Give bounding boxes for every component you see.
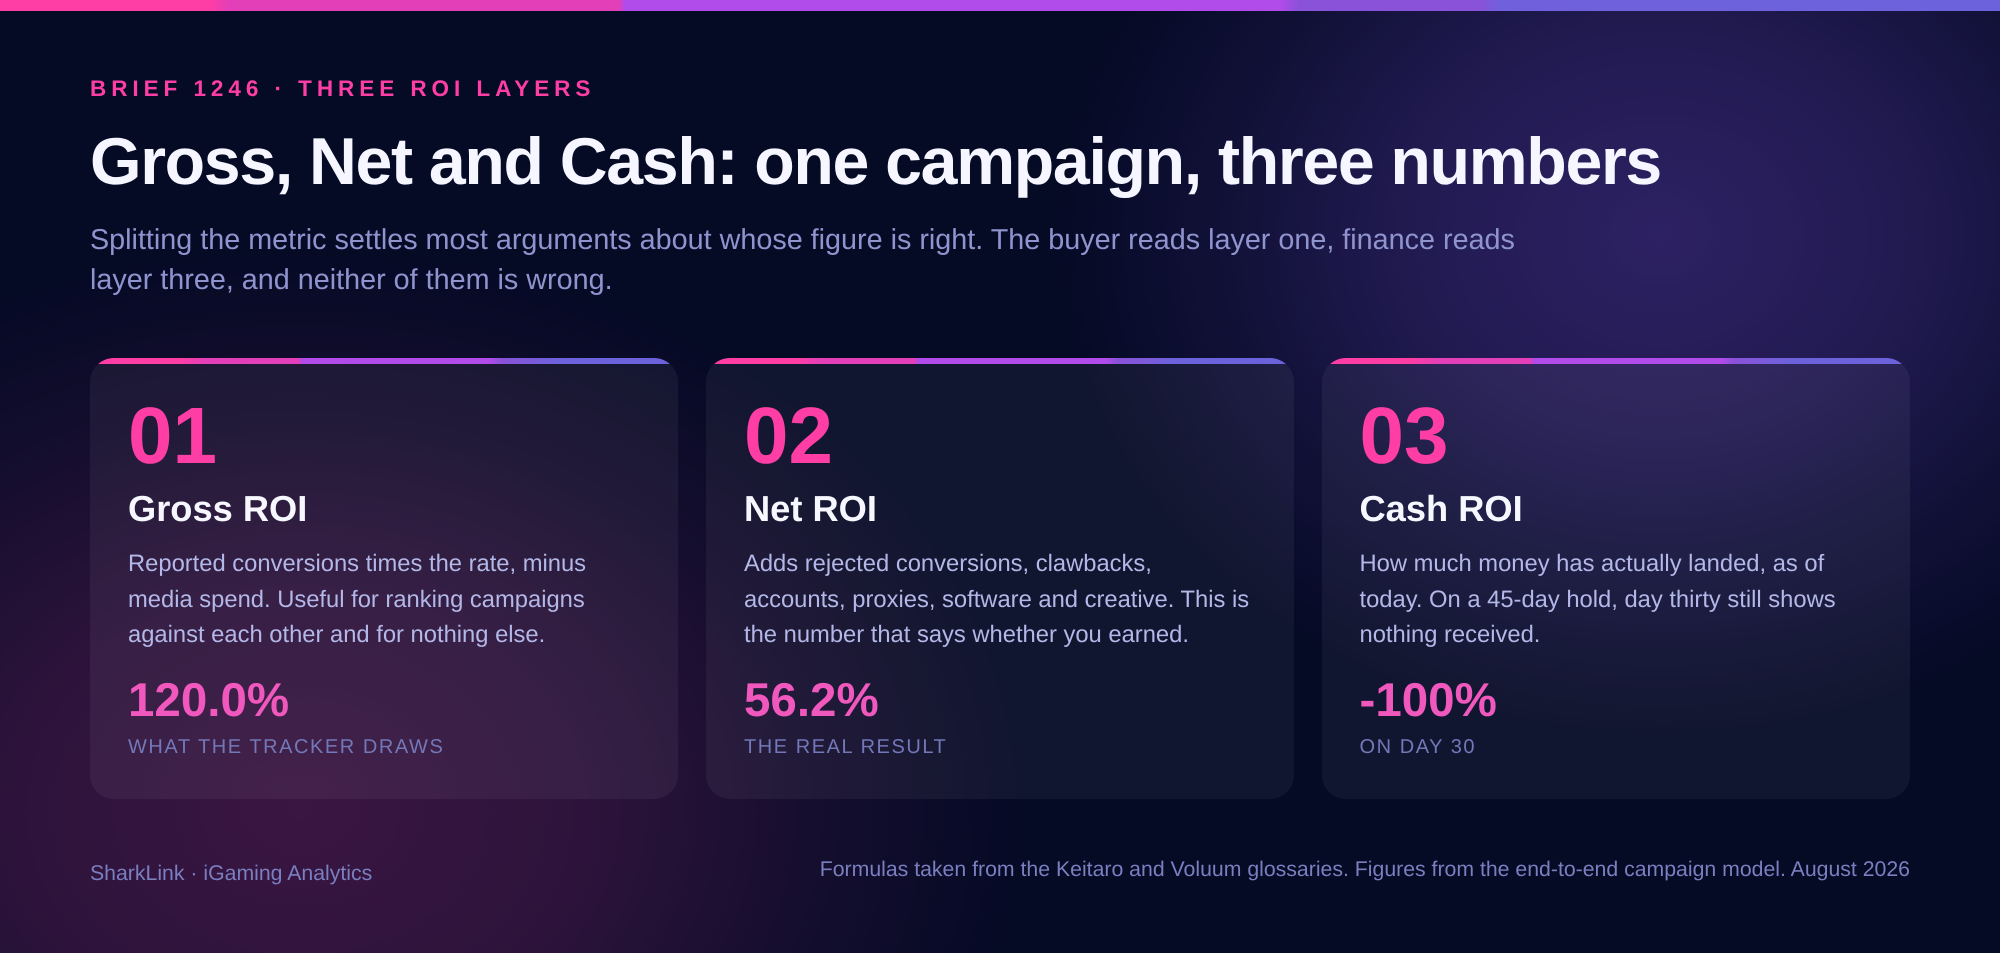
subtitle: layer three, and neither of them is wrong. [90,264,613,296]
description: nothing received. [1360,621,1540,648]
subtitle [90,224,1515,296]
number 01: 01 [128,391,217,480]
description [1360,550,1836,648]
value: 120.0% [128,674,289,727]
heading: Cash ROI: Cash ROI [1360,488,1523,529]
description: today. On a 45-day hold, day thirty still shows [1360,586,1836,613]
description: against each other and for nothing else. [128,621,545,648]
number 03: 03 [1360,391,1448,480]
value label: WHAT THE TRACKER DRAWS [128,736,444,758]
description: accounts, proxies, software and creative. This is [744,586,1249,613]
top gradient bar [0,0,2000,11]
panel: gross ROI [90,358,678,799]
eyebrow: BRIEF 1246 · THREE ROI LAYERS [90,76,595,101]
description [744,550,1249,648]
footer source note: Formulas taken from the Keitaro and Voluum glossaries. Figures from the end-to-end campaign model. August 2026 [820,857,1910,881]
value: -100% [1360,674,1497,727]
number 02: 02 [744,391,833,480]
title: Gross, Net and Cash: one campaign, three numbers [90,125,1661,199]
value: 56.2% [744,674,879,727]
panel: cash ROI [1322,358,1910,799]
description: the number that says whether you earned. [744,621,1189,648]
card accent bar [90,358,678,364]
card accent bar [706,358,1294,364]
description: How much money has actually landed, as of [1360,550,1824,577]
footer brand: SharkLink · iGaming Analytics [90,861,372,885]
heading: Net ROI: Net ROI [744,488,877,529]
panel: net ROI [706,358,1294,799]
heading: Gross ROI: Gross ROI [128,488,307,529]
description: media spend. Useful for ranking campaigns [128,586,585,613]
description: Reported conversions times the rate, minus [128,550,586,577]
subtitle: Splitting the metric settles most arguments about whose figure is right. The buyer reads layer one, finance reads [90,224,1515,256]
card accent bar [1322,358,1910,364]
description [128,550,586,648]
value label: THE REAL RESULT [744,736,947,758]
description: Adds rejected conversions, clawbacks, [744,550,1152,577]
value label: ON DAY 30 [1360,736,1476,758]
